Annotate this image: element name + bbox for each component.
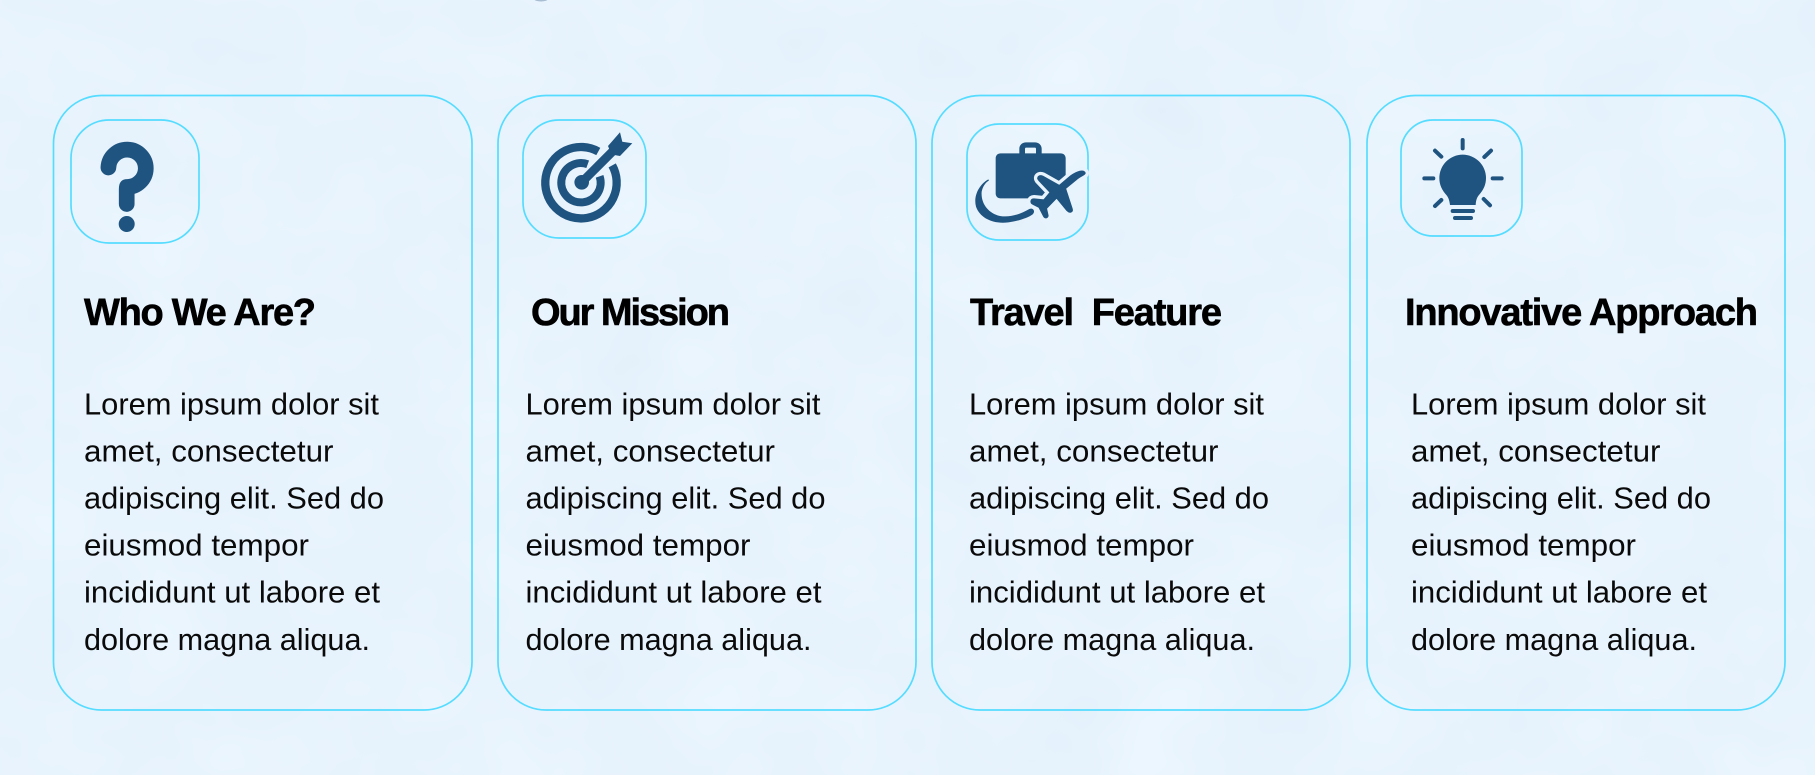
panel: Who We Are? — [54, 96, 472, 710]
icon: target with arrow — [523, 120, 646, 238]
heading: Travel Feature: Travel Feature — [970, 292, 1222, 334]
icon: question mark — [71, 120, 199, 243]
panel: Our Mission — [498, 96, 916, 710]
text block: Who We Are? description: Lorem ipsum dolor sit — [84, 387, 380, 421]
panel: Innovative Approach — [1367, 96, 1785, 710]
heading: Our Mission: Our Mission — [531, 292, 730, 334]
text block: Travel Feature description: incididunt ut labore et — [969, 576, 1266, 610]
text block: Our Mission description: Lorem ipsum dolor sit — [526, 387, 821, 421]
text block: Our Mission description: amet, consectetur — [526, 434, 775, 468]
text block: Innovative Approach description: adipiscing elit. Sed do — [1411, 482, 1711, 516]
text block: Who We Are? description — [84, 387, 384, 657]
text block: Innovative Approach description: eiusmod tempor — [1411, 529, 1636, 563]
icon: suitcase and plane — [967, 124, 1088, 240]
text block: Who We Are? description: eiusmod tempor — [84, 529, 309, 563]
text block: Our Mission description: eiusmod tempor — [526, 529, 750, 563]
text block: Travel Feature description: eiusmod tempor — [969, 529, 1194, 563]
text block: Innovative Approach description: dolore magna aliqua. — [1411, 623, 1697, 657]
text block: Travel Feature description: Lorem ipsum dolor sit — [969, 387, 1265, 421]
text block: Our Mission description: adipiscing elit. Sed do — [526, 482, 826, 516]
text block: Innovative Approach description: Lorem ipsum dolor sit — [1411, 387, 1707, 421]
icon: light bulb — [1401, 120, 1522, 236]
heading: Innovative Approach: Innovative Approach — [1405, 292, 1758, 334]
text block: Our Mission description: incididunt ut labore et — [526, 576, 822, 610]
text block: Travel Feature description: amet, consectetur — [969, 434, 1218, 468]
text block: Travel Feature description: adipiscing elit. Sed do — [969, 482, 1269, 516]
text block: Who We Are? description: incididunt ut labore et — [84, 576, 381, 610]
text block: Our Mission description: dolore magna aliqua. — [526, 623, 812, 657]
heading: Who We Are?: Who We Are? — [84, 292, 316, 334]
text block: Innovative Approach description: amet, consectetur — [1411, 434, 1660, 468]
text block: Our Mission description — [526, 387, 826, 657]
text block: Innovative Approach description — [1411, 387, 1711, 657]
panel: Travel Feature — [932, 96, 1350, 710]
text block: Who We Are? description: dolore magna aliqua. — [84, 623, 370, 657]
text block: Travel Feature description: dolore magna aliqua. — [969, 623, 1255, 657]
text block: Travel Feature description — [969, 387, 1269, 657]
text block: Who We Are? description: adipiscing elit. Sed do — [84, 482, 384, 516]
text block: Innovative Approach description: incididunt ut labore et — [1411, 576, 1708, 610]
text block: Who We Are? description: amet, consectetur — [84, 434, 334, 468]
